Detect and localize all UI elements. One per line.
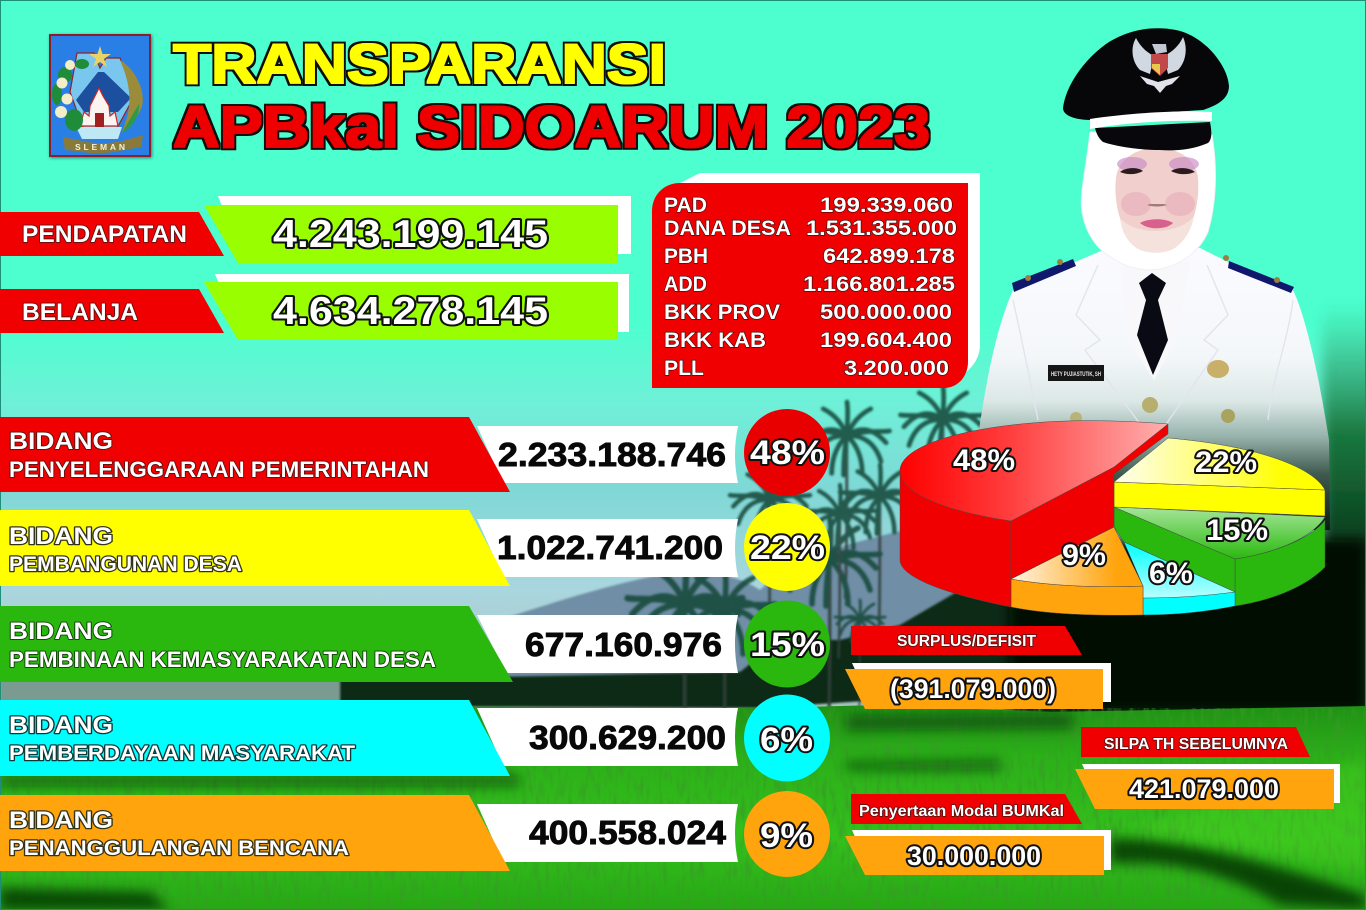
- lapels: [1013, 265, 1293, 440]
- slice: orange 9%: [1011, 527, 1143, 615]
- bar: bidang pemberdayaan masyarakat: 300.629.200: [529, 719, 726, 756]
- banner: [63, 135, 143, 153]
- panel: sumber pendapatan: 199.604.400: [820, 329, 952, 352]
- logo: Sleman regency crest: SLEMAN: [75, 142, 125, 152]
- logo: Sleman regency crest: [50, 35, 150, 156]
- title: APBkal SIDOARUM 2023: [173, 95, 930, 160]
- panel: sumber pendapatan: 1.166.801.285: [803, 273, 955, 296]
- panel: sumber pendapatan: 199.339.060: [820, 194, 953, 217]
- panel: sumber pendapatan: 3.200.000: [844, 357, 949, 380]
- slice: red 48%: [900, 421, 1168, 607]
- bar: bidang pembinaan kemasyarakatan desa: BIDANG: [9, 618, 113, 645]
- panel: sumber pendapatan: PAD: [664, 194, 707, 217]
- panel: pendapatan: [0, 196, 631, 263]
- bar: bidang penyelenggaraan pemerintahan: 48%: [750, 434, 825, 472]
- star: [89, 46, 111, 67]
- panel: penyertaan modal BUMKal: Penyertaan Modal BUMKal: [859, 803, 1064, 820]
- pie labels: 15%: [1206, 514, 1268, 547]
- bar: bidang penyelenggaraan pemerintahan: 2.233.188.746: [498, 436, 726, 473]
- panel: belanja: BELANJA: [22, 299, 138, 326]
- panel: surplus/defisit: [845, 626, 1111, 709]
- panel: surplus/defisit: (391.079.000): [890, 674, 1056, 704]
- portrait: village head in white uniform: [975, 28, 1330, 530]
- eyes and makeup: [1117, 157, 1199, 228]
- slice: yellow 22%: [1114, 438, 1325, 516]
- bar: bidang penyelenggaraan pemerintahan: BIDANG: [9, 428, 113, 455]
- dark forest: [340, 540, 1366, 712]
- panel: penyertaan modal BUMKal: [845, 794, 1111, 875]
- pie labels: 48%: [953, 444, 1015, 477]
- panel: sumber pendapatan: DANA DESA: [664, 217, 791, 240]
- bar: bidang pemberdayaan masyarakat: BIDANG: [9, 712, 113, 739]
- panel: pendapatan: 4.243.199.145: [273, 213, 548, 256]
- panel: sumber pendapatan: PLL: [664, 357, 704, 380]
- name tag: [1048, 365, 1104, 381]
- pie labels: 9%: [1062, 539, 1106, 572]
- bar: bidang pemberdayaan masyarakat: [0, 694, 830, 782]
- badge and buttons: [1070, 360, 1235, 424]
- shirt: [1120, 262, 1190, 380]
- panel: penyertaan modal BUMKal: 30.000.000: [907, 841, 1041, 871]
- bar: bidang pembangunan desa: 22%: [750, 529, 825, 567]
- mountain: [500, 500, 1010, 700]
- left foliage: [52, 59, 89, 131]
- name tag: HETY PUJIASTUTIK, SH: [1051, 371, 1101, 378]
- water: [76, 127, 122, 139]
- bar: bidang penyelenggaraan pemerintahan: [0, 409, 830, 496]
- pie labels: 22%: [1195, 446, 1257, 479]
- tie: [1137, 273, 1168, 375]
- panel: sumber pendapatan: ADD: [664, 273, 707, 296]
- panel: surplus/defisit: SURPLUS/DEFISIT: [897, 633, 1036, 650]
- bar: bidang pembangunan desa: PEMBANGUNAN DESA: [9, 553, 242, 576]
- panel: silpa tahun sebelumnya: SILPA TH SEBELUMNYA: [1104, 736, 1288, 753]
- bar: bidang penanggulangan bencana: BIDANG: [9, 807, 113, 834]
- panel: sumber pendapatan: 642.899.178: [823, 245, 955, 268]
- panel: sumber pendapatan: 1.531.355.000: [806, 217, 957, 240]
- shield: [70, 53, 135, 128]
- bar: bidang penanggulangan bencana: 400.558.024: [529, 814, 727, 851]
- title: TRANSPARANSI: [173, 32, 666, 95]
- title: [173, 32, 930, 160]
- bar: bidang penanggulangan bencana: PENANGGULANGAN BENCANA: [9, 837, 349, 860]
- panel: silpa tahun sebelumnya: 421.079.000: [1129, 774, 1279, 804]
- distant hills: [0, 680, 340, 705]
- panel: pendapatan: PENDAPATAN: [22, 221, 187, 248]
- face: [1115, 148, 1198, 252]
- panel: sumber pendapatan: [652, 173, 980, 388]
- hat: [1063, 28, 1229, 120]
- bar: bidang penyelenggaraan pemerintahan: PENYELENGGARAAN PEMERINTAHAN: [9, 457, 429, 482]
- temple: [80, 88, 118, 126]
- bar: bidang pembinaan kemasyarakatan desa: [0, 600, 830, 688]
- mountain: [76, 72, 131, 112]
- bar: bidang pembinaan kemasyarakatan desa: PEMBINAAN KEMASYARAKATAN DESA: [9, 647, 436, 672]
- slice: green 15%: [1114, 507, 1325, 606]
- panel: belanja: [0, 274, 629, 340]
- slice: cyan 6%: [1124, 542, 1235, 615]
- bar: bidang pemberdayaan masyarakat: PEMBERDAYAAN MASYARAKAT: [9, 742, 355, 765]
- panel: belanja: 4.634.278.145: [273, 290, 548, 333]
- bar: bidang penanggulangan bencana: 9%: [760, 817, 813, 855]
- panel: sumber pendapatan: BKK PROV: [664, 301, 780, 324]
- bar: bidang pembinaan kemasyarakatan desa: 15%: [750, 626, 825, 664]
- suit: [975, 248, 1330, 530]
- rice field: [0, 705, 1366, 910]
- panel: sumber pendapatan: 500.000.000: [820, 301, 952, 324]
- right foliage: [1322, 300, 1366, 590]
- bar: bidang penanggulangan bencana: [0, 791, 830, 877]
- palm trees: [628, 386, 986, 824]
- panel: silpa tahun sebelumnya: [1075, 727, 1340, 809]
- bar: bidang pembangunan desa: BIDANG: [9, 523, 113, 550]
- bar: bidang pembinaan kemasyarakatan desa: 677.160.976: [525, 626, 722, 663]
- panel: sumber pendapatan: BKK KAB: [664, 329, 766, 352]
- hijab: [1081, 132, 1215, 270]
- pie labels: [953, 444, 1268, 590]
- bar: bidang pemberdayaan masyarakat: 6%: [760, 721, 813, 759]
- pie labels: 6%: [1149, 557, 1193, 590]
- bar: bidang pembangunan desa: 1.022.741.200: [497, 529, 723, 566]
- right foliage: [120, 60, 143, 132]
- bar: bidang pembangunan desa: [0, 503, 830, 591]
- epaulettes: [1012, 259, 1076, 292]
- garuda badge: [1133, 37, 1186, 93]
- pie chart: belanja per bidang: [900, 421, 1325, 615]
- panel: sumber pendapatan: PBH: [664, 245, 708, 268]
